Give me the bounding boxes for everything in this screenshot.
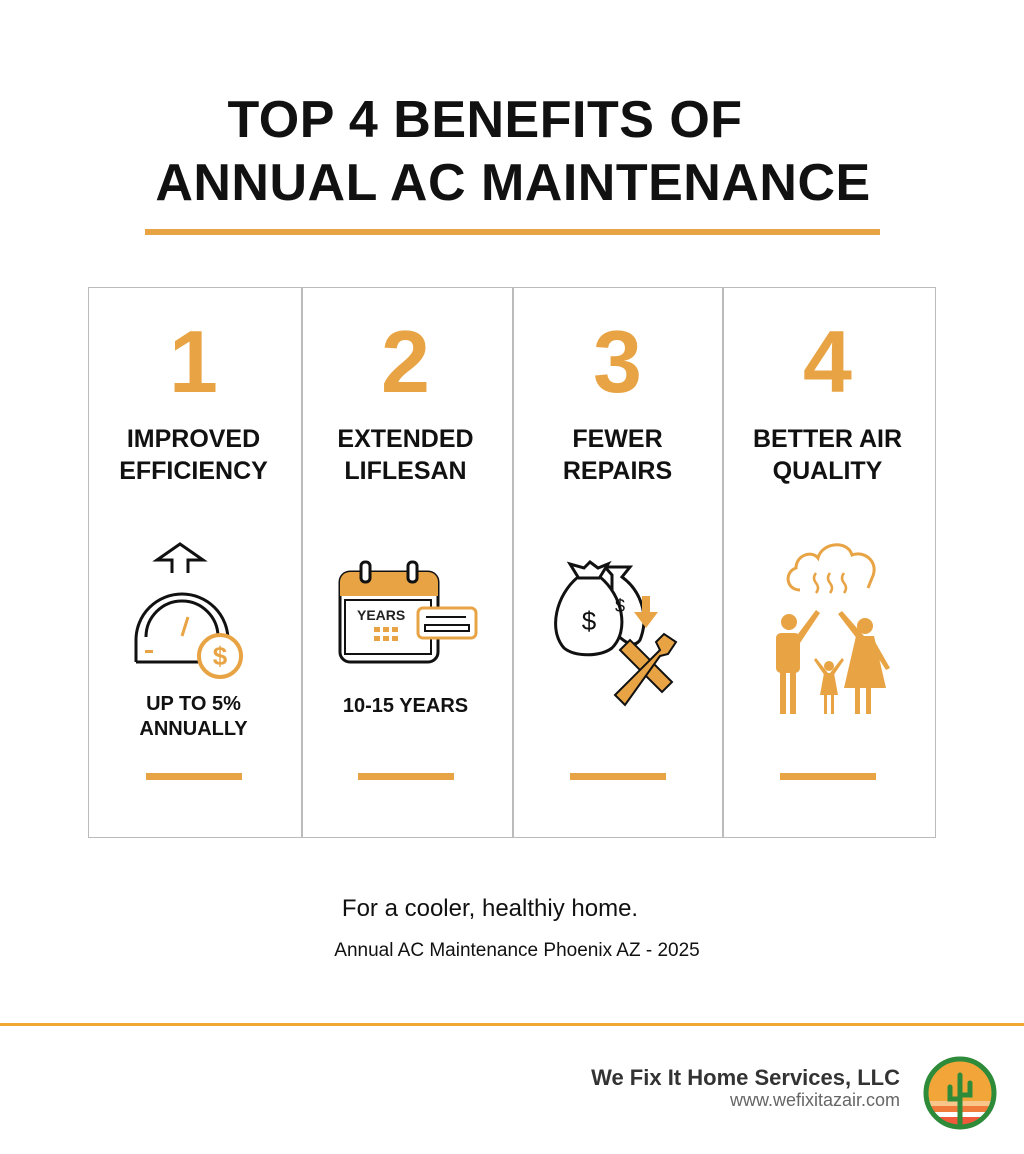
panel: fewer repairs: FEWER (572, 425, 663, 453)
icon: money bags and wrench (554, 560, 678, 706)
icon: money bags and wrench: $ (582, 606, 597, 636)
icon: calendar (338, 560, 478, 664)
subtitle: Annual AC Maintenance Phoenix AZ - 2025 (334, 940, 700, 961)
panel: improved efficiency: IMPROVED (127, 425, 260, 453)
panel: extended lifespan: 10-15 YEARS (343, 695, 468, 717)
panel: improved efficiency: ANNUALLY (139, 718, 248, 740)
icon: calendar: YEARS (357, 607, 405, 623)
panel: fewer repairs: 3 (593, 312, 642, 411)
title: ANNUAL AC MAINTENANCE (155, 154, 871, 212)
title (155, 91, 871, 212)
tagline: For a cooler, healthiy home. (342, 895, 638, 922)
panel: extended lifespan: LIFLESAN (344, 457, 467, 485)
panel: extended lifespan: EXTENDED (337, 425, 474, 453)
website: www.wefixitazair.com (730, 1090, 900, 1110)
panel: improved efficiency: UP TO 5% (146, 693, 241, 715)
icon: gauge with dollar: $ (213, 641, 228, 671)
title: TOP 4 BENEFITS OF (227, 91, 743, 149)
panel: improved efficiency: 1 (169, 312, 218, 411)
company name: We Fix It Home Services, LLC (591, 1065, 900, 1090)
panel: improved efficiency (119, 312, 268, 780)
footer divider (0, 1023, 1024, 1026)
panel: better air quality: 4 (803, 312, 852, 411)
icon: gauge with dollar (134, 542, 243, 679)
icon: cactus logo (924, 1056, 996, 1130)
panel: better air quality: QUALITY (773, 457, 882, 485)
panel: fewer repairs (554, 312, 678, 780)
panel: better air quality (753, 312, 902, 780)
panel: extended lifespan (337, 312, 478, 780)
icon: family with clean air cloud (776, 543, 890, 714)
panel: fewer repairs: REPAIRS (563, 457, 672, 485)
panel: better air quality: BETTER AIR (753, 425, 902, 453)
icon: money bags and wrench: $ (615, 596, 625, 616)
panel: benefits grid (88, 287, 936, 838)
title underline (145, 229, 880, 235)
panel: improved efficiency: EFFICIENCY (119, 457, 268, 485)
panel: extended lifespan: 2 (381, 312, 430, 411)
